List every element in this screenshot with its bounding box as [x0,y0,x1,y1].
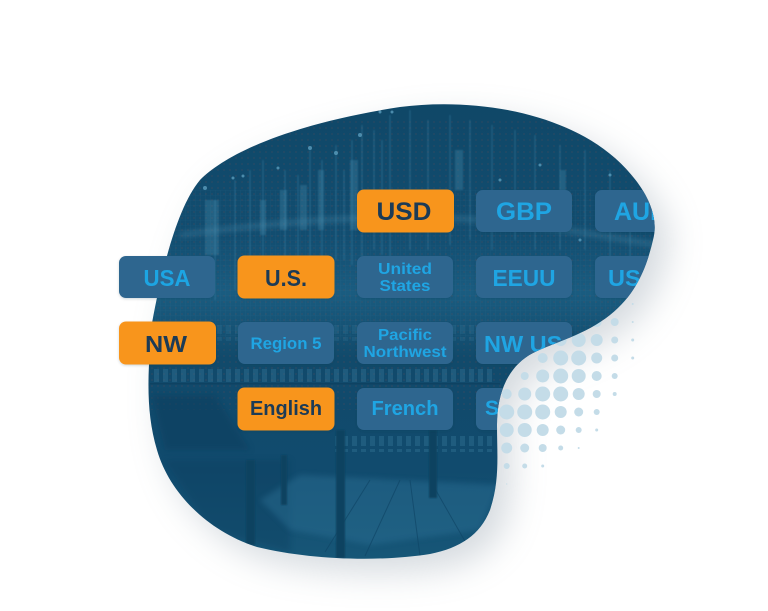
clipped tile labels: States [380,278,431,295]
clipped tile labels: GBP [496,198,552,226]
tile: NW selected [119,322,216,364]
clipped tile labels: NW US [484,331,562,357]
tile: USD selected: USD [376,198,432,226]
tile: USA: USA [144,265,191,291]
clipped tile labels: Spanish [485,397,567,420]
shelf rows [154,369,492,382]
pillars [246,430,437,558]
tile: NW selected: NW [145,331,188,357]
tile: U.S. selected: U.S. [265,265,307,291]
tile: U.S. selected [238,256,334,298]
floor highlights [260,475,500,545]
tile: USD selected [357,190,454,232]
clipped tile labels: United [378,261,432,278]
infographic canvas [118,104,681,587]
horizon glow band [180,217,660,245]
data glow clusters [205,150,566,255]
clipped tiles [238,190,691,430]
tile: English selected: English [250,398,322,420]
blob drop shadow [162,118,669,573]
halftone dot pattern [499,303,634,485]
tile: English selected [238,388,334,430]
clipped tile labels: USc [608,265,654,291]
clipped tile labels: Northwest [364,344,447,361]
clipped tile labels: French [372,398,438,420]
clipped tile labels: EEUU [492,265,556,291]
data streaks [215,110,630,300]
data points [203,110,612,242]
clipped tile labels: Region 5 [250,335,322,353]
clipped tile labels: Pacific [378,327,432,344]
tile: USA [119,256,215,298]
dark desk wedge [152,398,242,446]
clipped tile labels: AUD [614,198,668,226]
clipped tile labels [250,198,668,420]
blob with data-centre photo texture [148,104,655,559]
